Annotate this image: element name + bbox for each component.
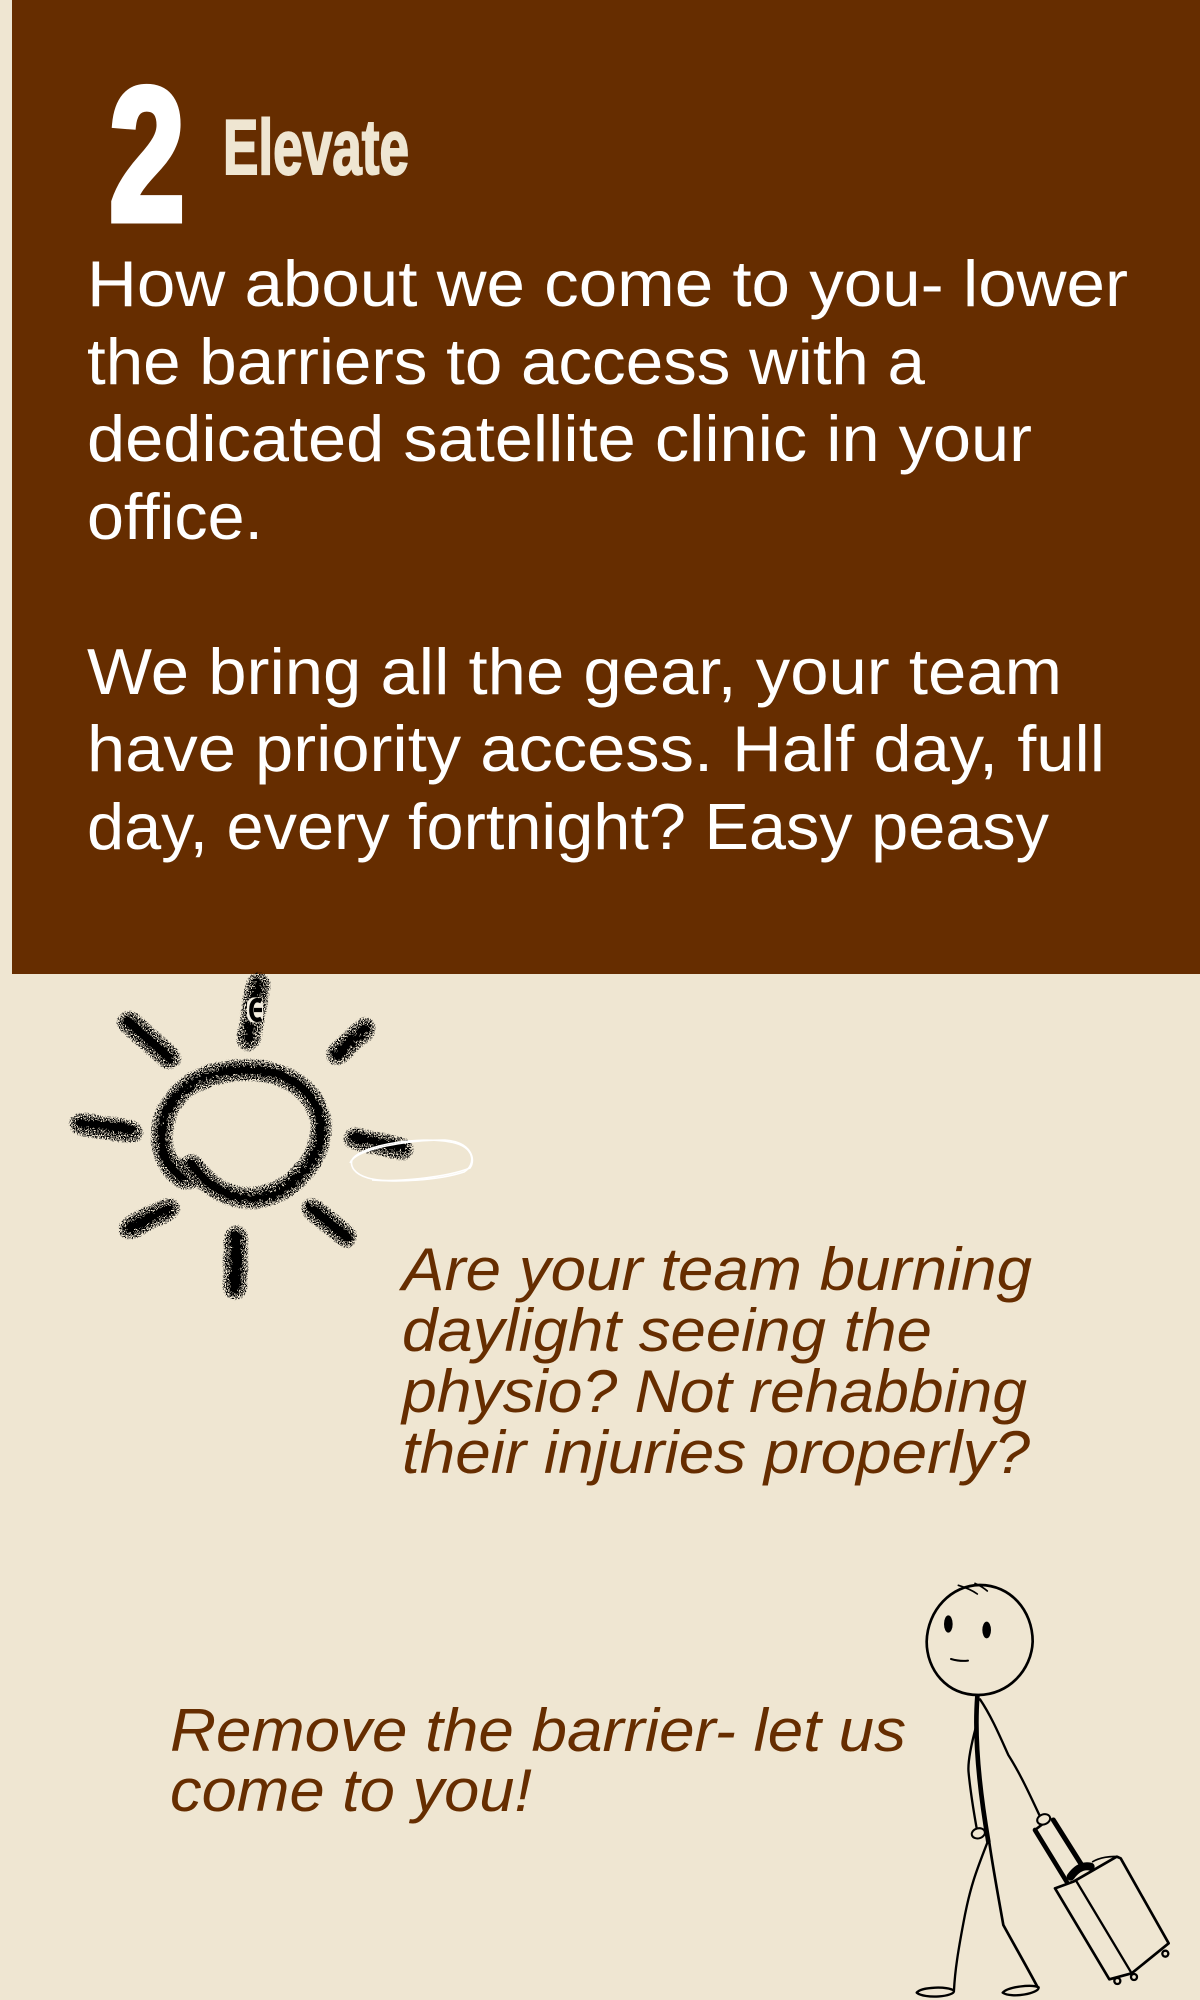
text block: call to action [170,1697,906,1824]
heading: Elevate: Elevate [223,103,409,191]
suitcase [1035,1812,1169,1984]
text block: second paragraph: day, every fortnight? Easy peasy [87,790,1050,863]
text block: question [399,1236,1032,1486]
text block: second paragraph [87,635,1105,863]
panel: brown header [12,0,1200,974]
text block: second paragraph: We bring all the gear, your team [87,635,1062,708]
step number: 2 [109,49,185,261]
figure head [927,1583,1033,1695]
text block: intro paragraph: How about we come to you- lower [87,247,1128,320]
figure body and limbs [917,1697,1039,1997]
callout outline: white scribble [350,1140,472,1181]
text block: intro paragraph: dedicated satellite clinic in your [87,402,1032,475]
text block: question: Are your team burning [399,1236,1032,1303]
text block: question: their injuries properly? [402,1419,1031,1486]
text block: question: daylight seeing the [402,1297,932,1364]
text block: intro paragraph [87,247,1128,553]
text block: intro paragraph: office. [87,480,263,553]
text block: call to action: come to you! [170,1757,532,1824]
text block: question: physio? Not rehabbing [400,1358,1027,1425]
icon: hand-drawn sun [80,983,403,1288]
text block: second paragraph: have priority access. Half day, full [87,712,1105,785]
text block: intro paragraph: the barriers to access with a [87,325,926,398]
text block: call to action: Remove the barrier- let us [170,1697,906,1764]
icon: stick figure pulling a suitcase [917,1583,1169,1997]
